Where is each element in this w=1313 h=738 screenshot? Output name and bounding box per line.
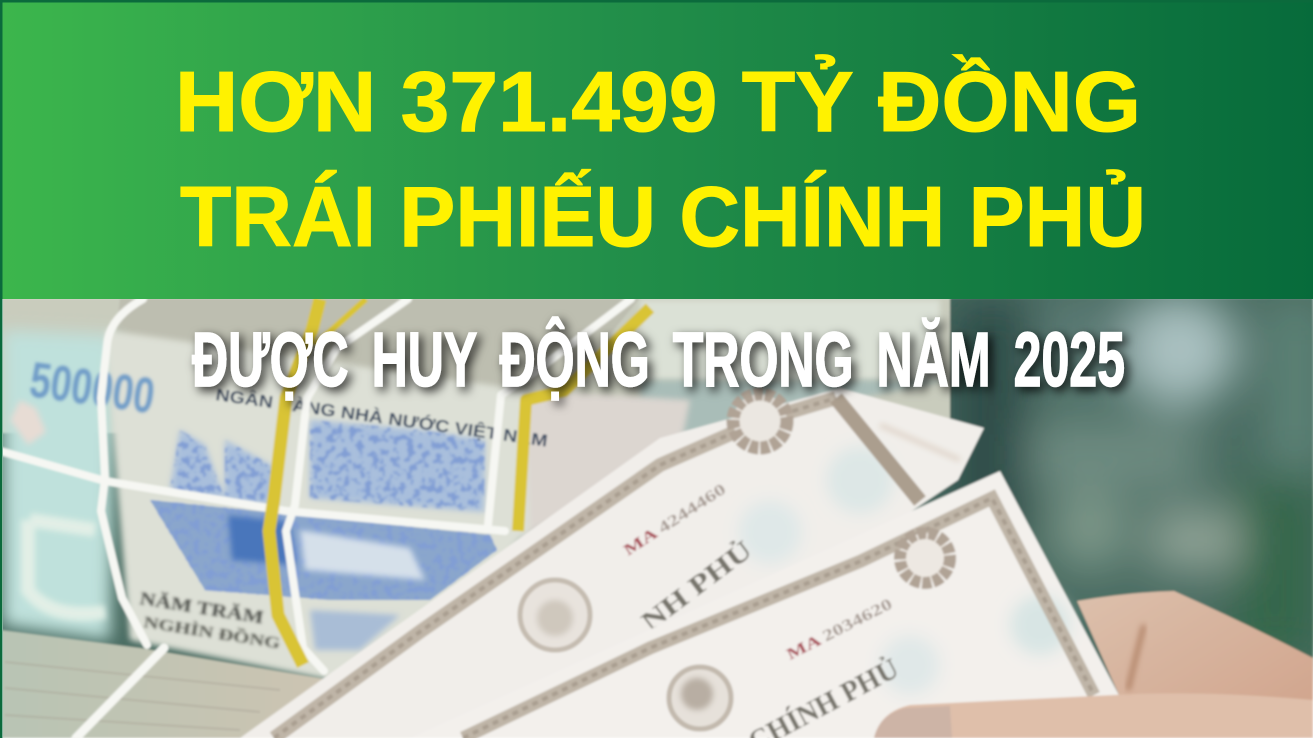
- vignette blue trees: [170, 420, 485, 512]
- rosette: [900, 533, 950, 583]
- title: HƠN 371.499 TỶ ĐỒNG: [175, 54, 1141, 150]
- bond label: NH PHỦ: [636, 535, 757, 637]
- stack edges: [0, 630, 330, 738]
- title: TRÁI PHIẾU CHÍNH PHỦ: [180, 169, 1146, 265]
- title: [175, 54, 1146, 265]
- icon: banknote stack: NĂM TRĂM: [138, 587, 265, 628]
- icon: lower bond certificate: [410, 471, 1119, 738]
- icon: banknote stack: NGÂN HÀNG NHÀ NƯỚC VIỆT NAM: [214, 385, 549, 451]
- icon: banknote stack: [0, 298, 950, 738]
- icon: upper bond certificate: [240, 388, 984, 738]
- blurred background: [950, 295, 1313, 660]
- icon: banknote stack: NGHÌN ĐỒNG: [142, 611, 283, 653]
- seal: [520, 580, 590, 650]
- rosette: [733, 394, 787, 448]
- bond number: MA 2034620: [784, 596, 895, 664]
- seal: [669, 667, 731, 729]
- photo: money and government bonds: [0, 295, 1313, 738]
- bond number: MA 4244460: [621, 481, 729, 559]
- money band strings: [0, 299, 631, 738]
- text on banknote: 500000: [26, 351, 158, 424]
- banknote watermark: [28, 520, 105, 614]
- icon: hand holding bonds: [874, 591, 1313, 738]
